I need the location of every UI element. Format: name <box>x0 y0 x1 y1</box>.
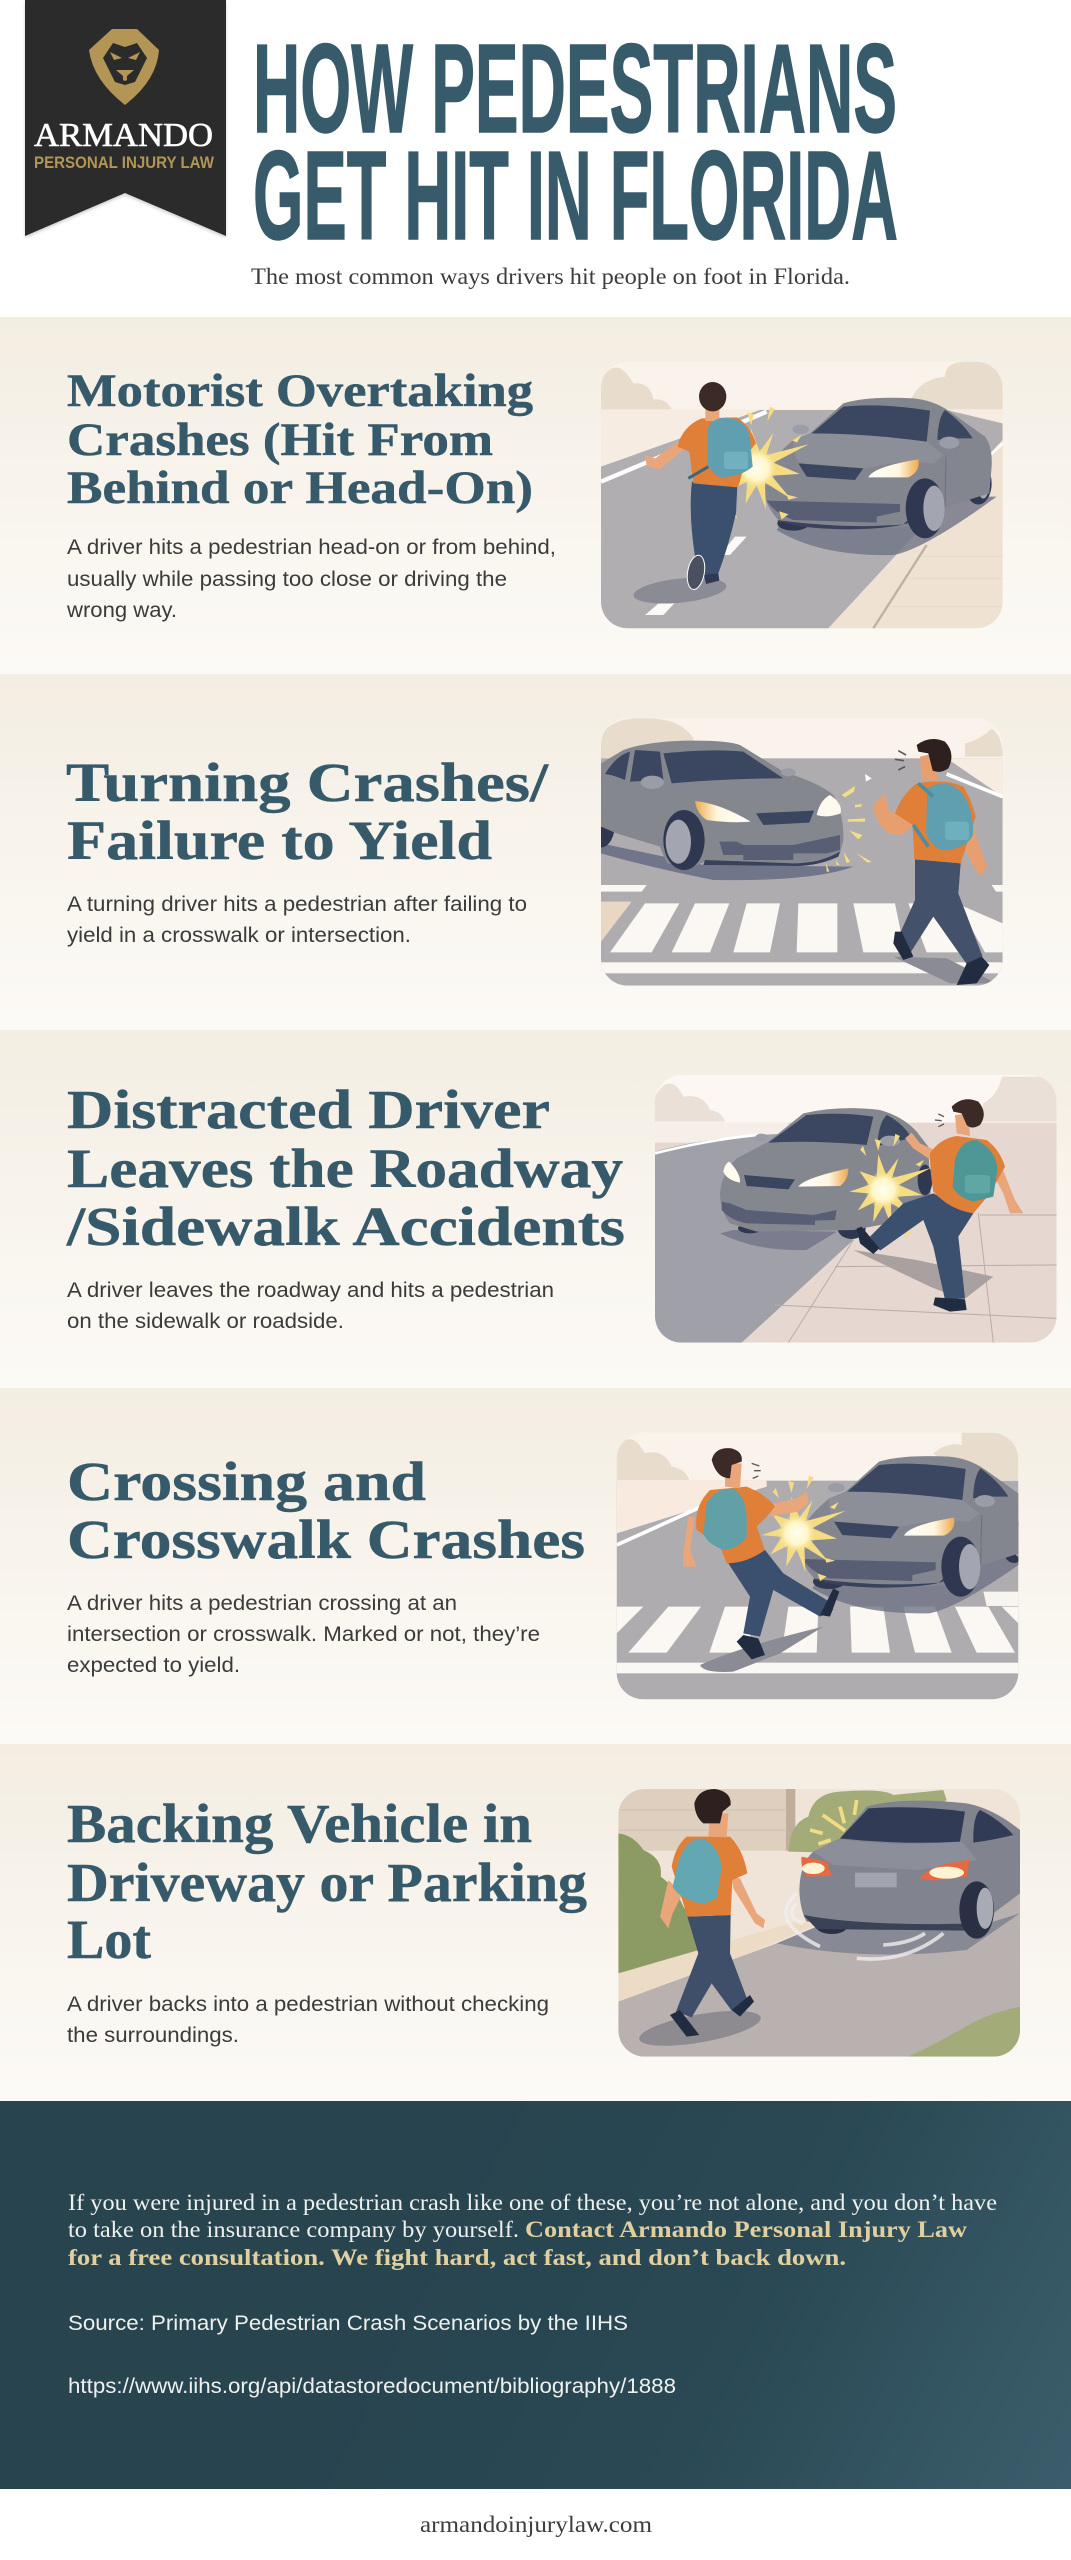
heading: Behind or Head-On) <box>67 462 533 514</box>
description: intersection or crosswalk. Marked or not, they’re <box>67 1623 540 1646</box>
call to action text: to take on the insurance company by yourself. <box>68 2217 519 2242</box>
heading: Leaves the Roadway <box>67 1138 623 1199</box>
heading <box>67 1793 587 1970</box>
description: usually while passing too close or driving the <box>67 568 507 591</box>
call to action text <box>68 2190 997 2270</box>
illustration: turning car and pedestrian in crosswalk <box>588 718 1003 986</box>
description <box>67 1993 549 2047</box>
panel: distracted driver leaves the roadway <box>0 1030 1071 1388</box>
heading: Lot <box>67 1909 152 1970</box>
description: A driver hits a pedestrian crossing at an <box>67 1592 457 1615</box>
heading: Distracted Driver <box>67 1079 550 1140</box>
description: the surroundings. <box>67 2024 239 2047</box>
description: A driver backs into a pedestrian without checking <box>67 1993 549 2016</box>
heading <box>67 365 534 514</box>
heading: Turning Crashes/ <box>66 752 549 813</box>
panel: turning crashes <box>0 674 1071 1030</box>
heading: Backing Vehicle in <box>67 1793 532 1854</box>
description: yield in a crosswalk or intersection. <box>67 924 411 947</box>
heading: /Sidewalk Accidents <box>66 1196 625 1257</box>
panel: crossing and crosswalk crashes <box>0 1388 1071 1744</box>
heading: Crashes (Hit From <box>67 414 493 466</box>
illustration: car hits pedestrian in crosswalk <box>617 1433 1032 1699</box>
icon: gold lion shield <box>89 29 159 105</box>
pedestrian <box>874 739 997 985</box>
description <box>67 1592 540 1677</box>
logo ribbon: ARMANDO <box>34 117 213 154</box>
warning rays <box>810 1800 857 1844</box>
near miss ticks <box>826 786 872 872</box>
subtitle: The most common ways drivers hit people on foot in Florida. <box>251 264 850 289</box>
logo ribbon <box>25 0 226 238</box>
pedestrian <box>632 382 756 607</box>
illustration: car backing toward pedestrian <box>618 1789 1020 2057</box>
description: A turning driver hits a pedestrian after failing to <box>67 893 527 916</box>
description: on the sidewalk or roadside. <box>67 1310 344 1333</box>
logo ribbon: PERSONAL INJURY LAW <box>34 154 214 172</box>
description: A driver hits a pedestrian head-on or from behind, <box>67 536 556 559</box>
description <box>67 1279 554 1333</box>
car <box>720 1108 932 1250</box>
call to action text: If you were injured in a pedestrian crash like one of these, you’re not alone, and you don’t have <box>68 2190 997 2215</box>
source url: https://www.iihs.org/api/datastoredocument/bibliography/1888 <box>68 2375 676 2398</box>
description <box>66 536 556 622</box>
description <box>67 893 527 947</box>
description: expected to yield. <box>67 1654 240 1677</box>
heading: Crosswalk Crashes <box>67 1509 585 1570</box>
sonar arcs <box>786 1893 943 1959</box>
heading: Motorist Overtaking <box>67 365 534 417</box>
description: wrong way. <box>66 599 177 622</box>
header <box>25 0 898 289</box>
call to action text: for a free consultation. We fight hard, act fast, and don’t back down. <box>68 2245 846 2270</box>
heading: Driveway or Parking <box>67 1852 587 1913</box>
heading: Failure to Yield <box>67 810 492 871</box>
illustration: car leaves road and hits pedestrian on sidewalk <box>655 1075 1057 1343</box>
heading: Crossing and <box>67 1451 426 1512</box>
pedestrian <box>853 1099 1023 1312</box>
heading <box>66 752 549 871</box>
reversing car <box>777 1801 1020 1955</box>
title <box>253 18 898 266</box>
pedestrian <box>683 1448 839 1672</box>
call to action text: Contact Armando Personal Injury Law <box>525 2217 967 2242</box>
description: A driver leaves the roadway and hits a pedestrian <box>67 1279 554 1302</box>
heading <box>67 1451 585 1570</box>
panel: backing vehicle <box>0 1744 1071 2101</box>
footer website: armandoinjurylaw.com <box>420 2512 652 2537</box>
panel: motorist overtaking crashes <box>0 317 1071 674</box>
pedestrian <box>637 1789 765 2053</box>
heading <box>66 1079 625 1257</box>
illustration: pedestrian hit by overtaking car <box>601 362 1003 628</box>
panel: call to action and source <box>0 2101 1071 2489</box>
car <box>588 741 853 880</box>
source: Source: Primary Pedestrian Crash Scenarios by the IIHS <box>68 2312 628 2335</box>
